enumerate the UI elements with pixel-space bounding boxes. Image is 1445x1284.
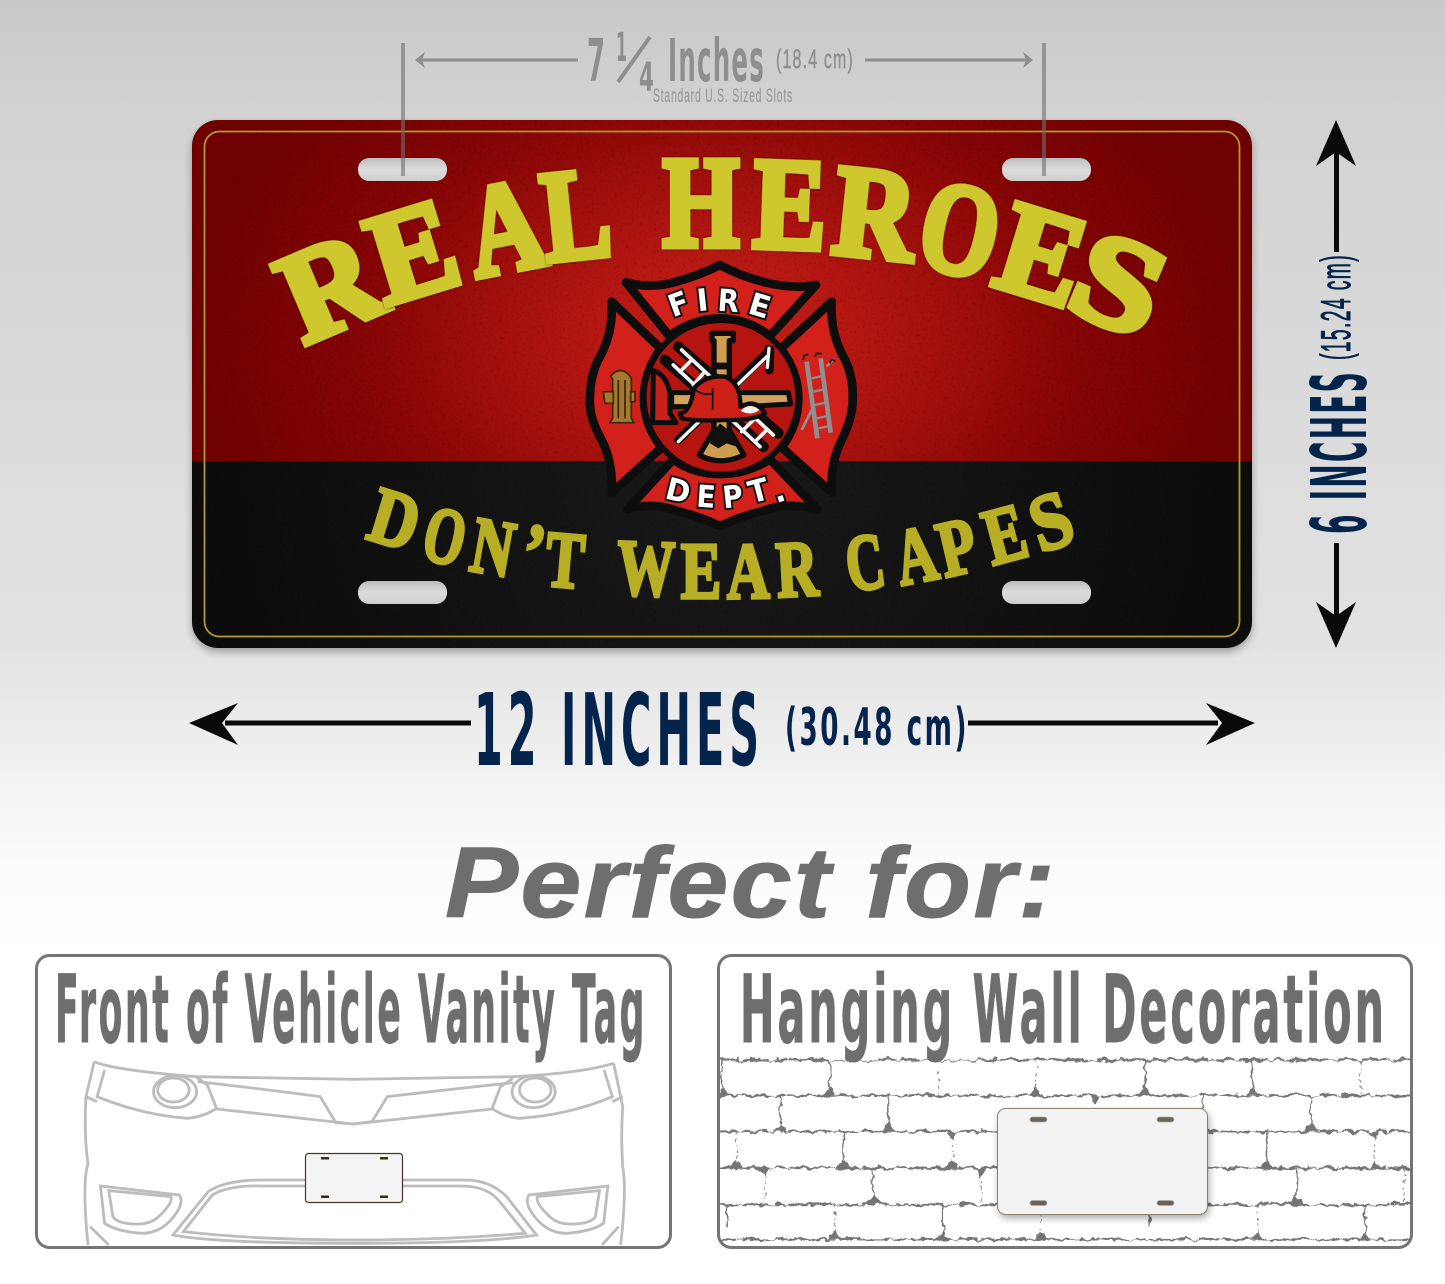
horizontal arrow: [189, 703, 1255, 745]
heading: DON'T WEAR CAPES: E: [974, 487, 1036, 583]
cross arms: [590, 265, 853, 526]
horn nozzle: [699, 333, 744, 461]
slot width label: Inches: [668, 26, 765, 95]
mini plate: [306, 1154, 402, 1202]
text: DEPT.: [662, 471, 790, 516]
dimension: slot spacing: [401, 25, 1046, 176]
heading: DON'T WEAR CAPES: [359, 470, 1084, 617]
center medallion: [644, 320, 798, 475]
heading: REAL HEROES: H: [663, 130, 739, 274]
slot width label: (18.4 cm): [776, 44, 854, 74]
text: DEPT.: P: [721, 478, 745, 516]
ladder icon: [802, 353, 835, 438]
heading: REAL HEROES: E: [982, 174, 1102, 336]
heading: DON'T WEAR CAPES: W: [616, 524, 676, 614]
slot width label: 1: [616, 25, 627, 71]
heading: REAL HEROES: R: [827, 138, 925, 290]
text: FIRE: F: [663, 285, 694, 325]
heading: DON'T WEAR CAPES: A: [888, 507, 944, 602]
text: DEPT.: D: [662, 471, 694, 512]
heading: Perfect for: Perfect for:: [445, 827, 1057, 939]
heading: DON'T WEAR CAPES: O: [415, 488, 475, 584]
text: DEPT.: E: [695, 478, 717, 515]
heading: DON'T WEAR CAPES: N: [465, 501, 521, 595]
heading: DON'T WEAR CAPES: ’: [517, 506, 551, 598]
car front outline: [85, 1062, 624, 1245]
text: FIRE: [663, 282, 775, 327]
axe: [653, 371, 791, 423]
slot width arrows: [415, 52, 1033, 68]
heading: DON'T WEAR CAPES: D: [359, 470, 431, 568]
hanging blank plate: [998, 1108, 1209, 1218]
text: FIRE: E: [744, 287, 775, 327]
panel: hanging wall decoration: [717, 956, 1412, 1248]
brick wall: [717, 1059, 1412, 1240]
mounting slots: [358, 158, 1091, 604]
dimension: plate width: [189, 672, 1255, 789]
width metric label: (30.48 cm): [785, 698, 969, 758]
heading: DON'T WEAR CAPES: C: [840, 516, 890, 609]
text: DEPT.: T: [745, 471, 774, 511]
heading: REAL HEROES: O: [908, 151, 1013, 308]
heading: REAL HEROES: A: [454, 150, 556, 306]
text: DEPT.: .: [768, 474, 790, 511]
heading: REAL HEROES: S: [1051, 201, 1187, 367]
heading: REAL HEROES: R: [259, 202, 403, 372]
dimension: plate height: 6 INCHES: [1296, 370, 1385, 534]
slot guide lines: [401, 43, 1046, 176]
vertical arrow: [1316, 120, 1356, 648]
heading: DON'T WEAR CAPES: T: [542, 515, 588, 607]
fire helmet: [680, 376, 765, 421]
heading: REAL HEROES: E: [352, 170, 474, 333]
heading: REAL HEROES: [259, 130, 1187, 372]
panel: front of vehicle vanity tag: [36, 956, 670, 1248]
heading: DON'T WEAR CAPES: E: [681, 528, 721, 616]
text: FIRE: R: [716, 282, 740, 319]
heading: REAL HEROES: E: [751, 131, 829, 277]
ladder and hook crossed: [665, 347, 778, 447]
slots caption: Standard U.S. Sized Slots: [653, 86, 793, 107]
emblem: fire department maltese cross: [590, 265, 853, 526]
slot width label: 7: [587, 26, 605, 95]
hydrant: [603, 370, 635, 423]
dimension: plate height: (15.24 cm): [1312, 254, 1359, 360]
heading: REAL HEROES: L: [535, 140, 617, 290]
text: FIRE: I: [695, 283, 710, 319]
heading: DON'T WEAR CAPES: A: [726, 527, 770, 617]
dimension: plate width: 12 INCHES: [474, 672, 764, 789]
heading: DON'T WEAR CAPES: R: [774, 525, 821, 615]
license plate: [192, 120, 1252, 652]
heading: DON'T WEAR CAPES: S: [1019, 474, 1084, 570]
slot width label: 4: [639, 55, 654, 101]
slot width label: [587, 25, 854, 101]
heading: DON'T WEAR CAPES: P: [929, 501, 985, 595]
